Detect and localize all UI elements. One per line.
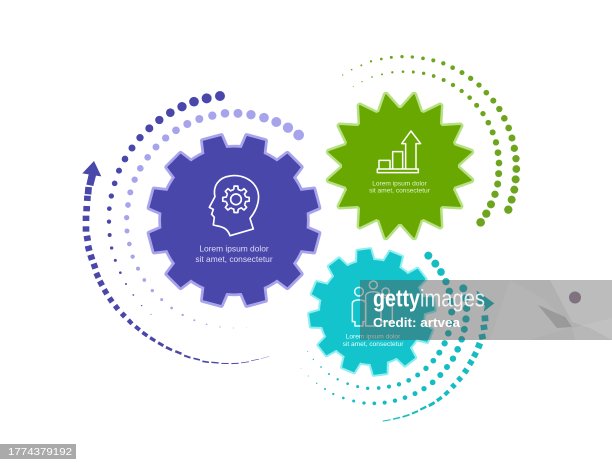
text: teal gear caption: sit amet, consectetur — [343, 341, 404, 348]
gear: green — [326, 92, 474, 240]
text: purple gear caption — [195, 244, 273, 264]
dashed arrow arc: teal — [383, 291, 494, 422]
dotted arc: light purple — [124, 109, 304, 328]
icon: head with gear — [209, 176, 259, 236]
text: purple gear caption: sit amet, consectetur — [195, 254, 273, 264]
watermark logo: getty — [373, 286, 421, 312]
icon: group of people — [352, 281, 392, 326]
text: teal gear caption — [343, 334, 404, 348]
gear: purple — [149, 135, 319, 306]
image id tag: 1774379192 — [8, 447, 72, 458]
text: green gear caption: Lorem ipsum dolor — [372, 180, 428, 188]
dotted arc: green inner — [353, 70, 502, 227]
dashed arrow arc: purple — [82, 161, 269, 364]
text: green gear caption: sit amet, consectetur — [369, 188, 431, 194]
watermark logo — [373, 286, 485, 312]
icon: growth chart with arrow — [377, 131, 421, 173]
watermark logo: images — [420, 286, 485, 312]
text: purple gear caption: Lorem ipsum dolor — [199, 244, 269, 254]
text: green gear caption — [369, 180, 431, 194]
watermark banner — [360, 280, 612, 340]
dotted arc: dark purple — [107, 91, 225, 315]
watermark credit: Credit: artvea — [373, 315, 461, 330]
dotted arc: teal inner — [307, 252, 455, 390]
dotted arc: teal outer — [301, 284, 470, 405]
gear: teal — [309, 249, 435, 375]
image id tag — [0, 444, 76, 459]
text: teal gear caption: Lorem ipsum dolor — [346, 334, 401, 340]
dotted arc: green outer — [342, 55, 520, 214]
